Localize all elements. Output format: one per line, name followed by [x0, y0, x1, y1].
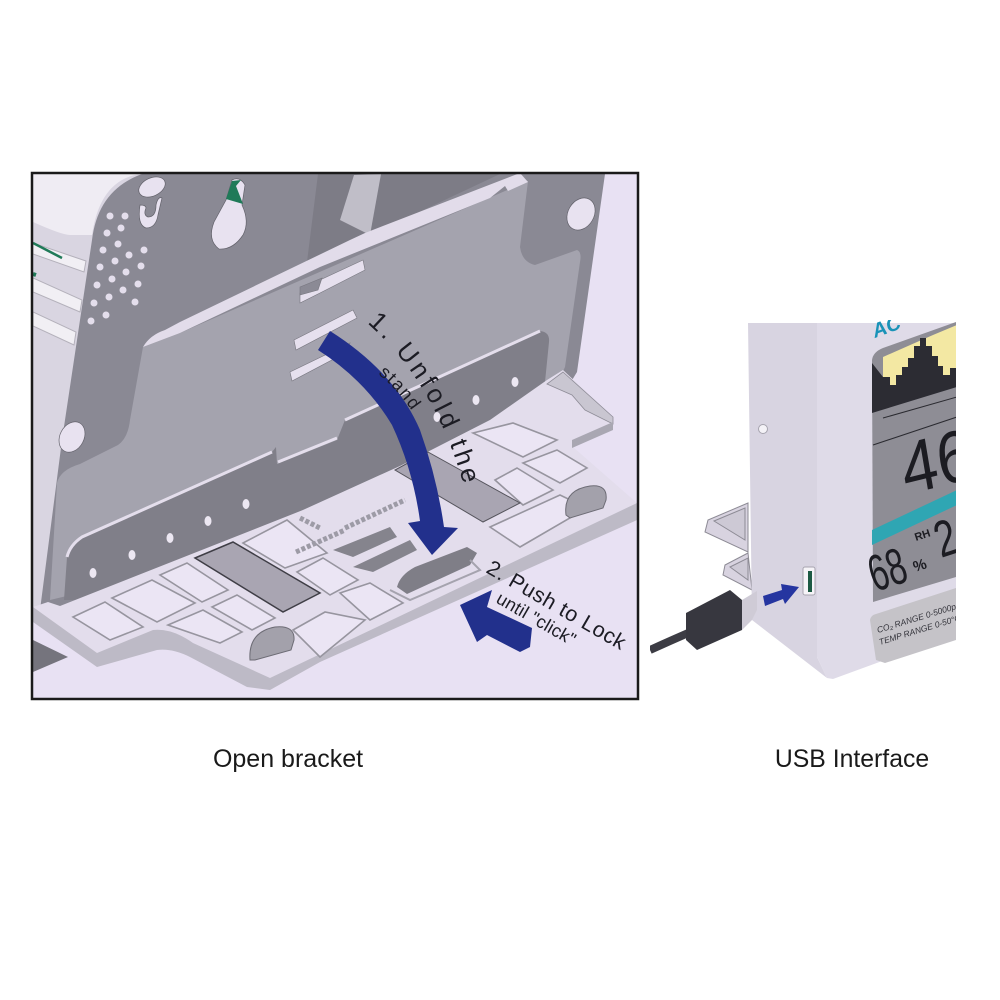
arrow: push to lock	[460, 590, 532, 652]
gray rectangle pad right	[395, 452, 520, 522]
humidity reading: 68	[861, 538, 914, 603]
text: until click: until "click"	[493, 588, 580, 650]
plate mounting holes	[54, 173, 601, 457]
range label plate	[870, 588, 956, 663]
text: stand: stand	[380, 368, 422, 410]
caption: USB interface: USB Interface	[775, 746, 929, 773]
tray corner hook	[547, 372, 613, 424]
panel border	[32, 173, 638, 699]
panel: open bracket illustration	[33, 174, 637, 698]
graph axis	[873, 397, 957, 445]
RH label: RH	[913, 528, 932, 544]
tray end strip	[572, 422, 613, 448]
temperature reading: 2	[927, 507, 965, 569]
light stand plate	[50, 181, 581, 600]
gray rectangle pad left	[195, 542, 320, 612]
big reading: 46	[895, 412, 979, 511]
tray cells	[73, 423, 587, 657]
tray slots	[333, 527, 417, 572]
band highlight line	[67, 331, 540, 557]
locking knob right	[566, 486, 606, 518]
dark upper recess	[307, 174, 500, 262]
locking knob left	[250, 627, 294, 660]
fold-out tray	[33, 370, 637, 690]
text: push to lock: 2. Push to Lock	[482, 556, 631, 655]
lower dark band	[64, 331, 549, 600]
USB cable	[650, 630, 695, 650]
USB plug	[686, 590, 742, 650]
teal band	[872, 490, 957, 545]
caption: open bracket: Open bracket	[213, 745, 363, 773]
stand window slots	[290, 260, 365, 381]
embossed tray lettering	[296, 500, 405, 552]
blue arrow: USB	[763, 584, 799, 606]
brand text: AC	[868, 312, 904, 343]
device body corner	[33, 174, 150, 610]
bracket feet	[705, 503, 752, 590]
screen	[872, 322, 956, 602]
infographic canvas	[30, 172, 956, 772]
side details	[758, 424, 768, 434]
perforated speaker holes	[88, 212, 148, 324]
yellow graph background	[883, 326, 956, 385]
white support piece	[340, 174, 381, 235]
dark back plate	[40, 174, 605, 640]
text: unfold the: 1. Unfold the	[368, 314, 476, 482]
upper white band	[143, 173, 528, 347]
silver connector	[742, 591, 757, 630]
device front	[817, 323, 956, 679]
panel: USB interface device	[650, 320, 956, 679]
band holes	[90, 377, 518, 578]
device side	[748, 323, 827, 678]
bottom-left plate shadow	[33, 640, 68, 672]
temp range text: TEMP RANGE 0-50°C/122°F	[878, 605, 986, 647]
range text: CO₂ RANGE 0-5000ppm	[876, 598, 968, 635]
CO2 bar chart	[872, 338, 957, 413]
percent label: %	[911, 556, 929, 576]
arrow: unfold the stand	[318, 331, 458, 555]
USB port	[803, 567, 815, 595]
latch	[397, 547, 477, 594]
